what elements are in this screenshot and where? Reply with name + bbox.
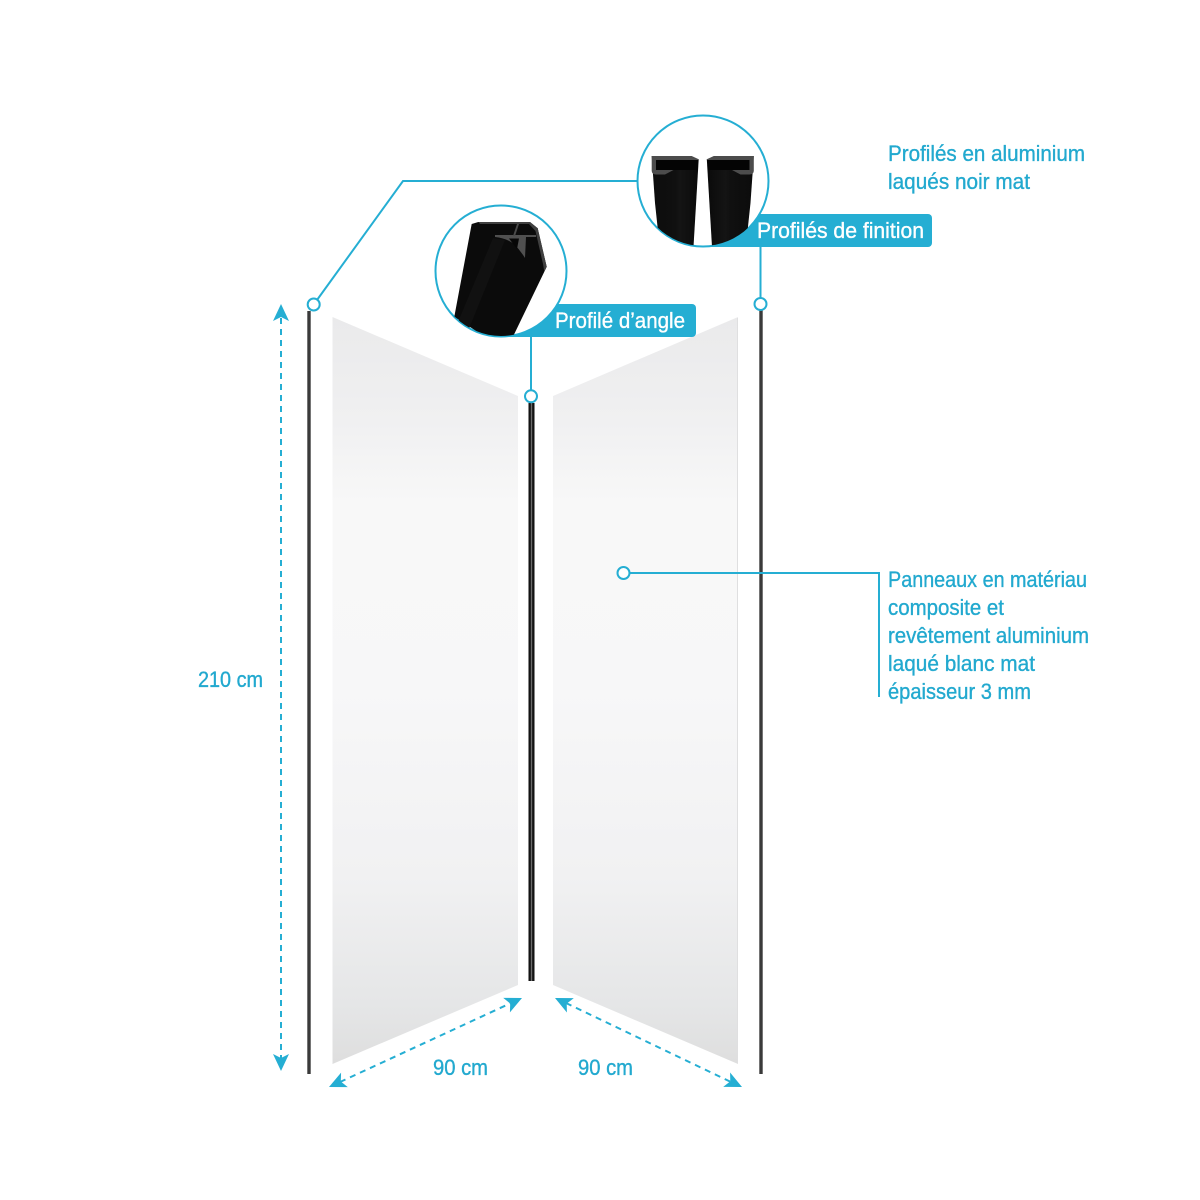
panel: left wall panel <box>332 317 518 1064</box>
connector: finishing profile to left rod <box>317 181 640 300</box>
right finishing profile rod <box>759 310 763 1074</box>
connector: angle label to centre rod <box>530 336 532 390</box>
icon: angle profile detail circle <box>436 206 566 340</box>
text: panel material description: épaisseur 3 mm <box>888 679 1031 704</box>
dimension arrow: height <box>273 304 289 1071</box>
connector dot: left rod <box>308 298 320 310</box>
connector: panel to description <box>629 573 879 697</box>
text: profile material description: laqués noir mat <box>888 169 1030 194</box>
text: profile material description <box>888 141 1085 194</box>
panel: right wall panel <box>553 317 738 1064</box>
left finishing profile rod <box>307 311 311 1074</box>
connector: finishing label to right rod <box>760 246 762 298</box>
text: left 90 cm: 90 cm <box>433 1055 488 1080</box>
connector dot: centre rod <box>525 390 537 402</box>
connector dot: panel <box>618 567 630 579</box>
label: Profilé d'angle <box>501 304 696 337</box>
text: panel material description: composite et <box>888 595 1004 620</box>
text: height 210 cm: 210 cm <box>198 667 263 692</box>
text: panel material description <box>888 567 1089 704</box>
label: Profilés de finition <box>703 214 932 247</box>
text: profile material description: Profilés en aluminium <box>888 141 1085 166</box>
label: Profilé d'angle: Profilé d’angle <box>555 308 685 333</box>
text: right 90 cm: 90 cm <box>578 1055 633 1080</box>
text: panel material description: revêtement aluminium <box>888 623 1089 648</box>
connector dot: right rod <box>754 298 766 310</box>
text: panel material description: laqué blanc mat <box>888 651 1035 676</box>
label: Profilés de finition: Profilés de finition <box>757 218 924 243</box>
dimension arrow: left width <box>326 991 525 1094</box>
centre angle profile rod <box>528 403 534 981</box>
icon: finishing profiles detail circle <box>638 116 768 250</box>
text: panel material description: Panneaux en matériau <box>888 567 1087 592</box>
dimension arrow: right width <box>552 991 745 1094</box>
